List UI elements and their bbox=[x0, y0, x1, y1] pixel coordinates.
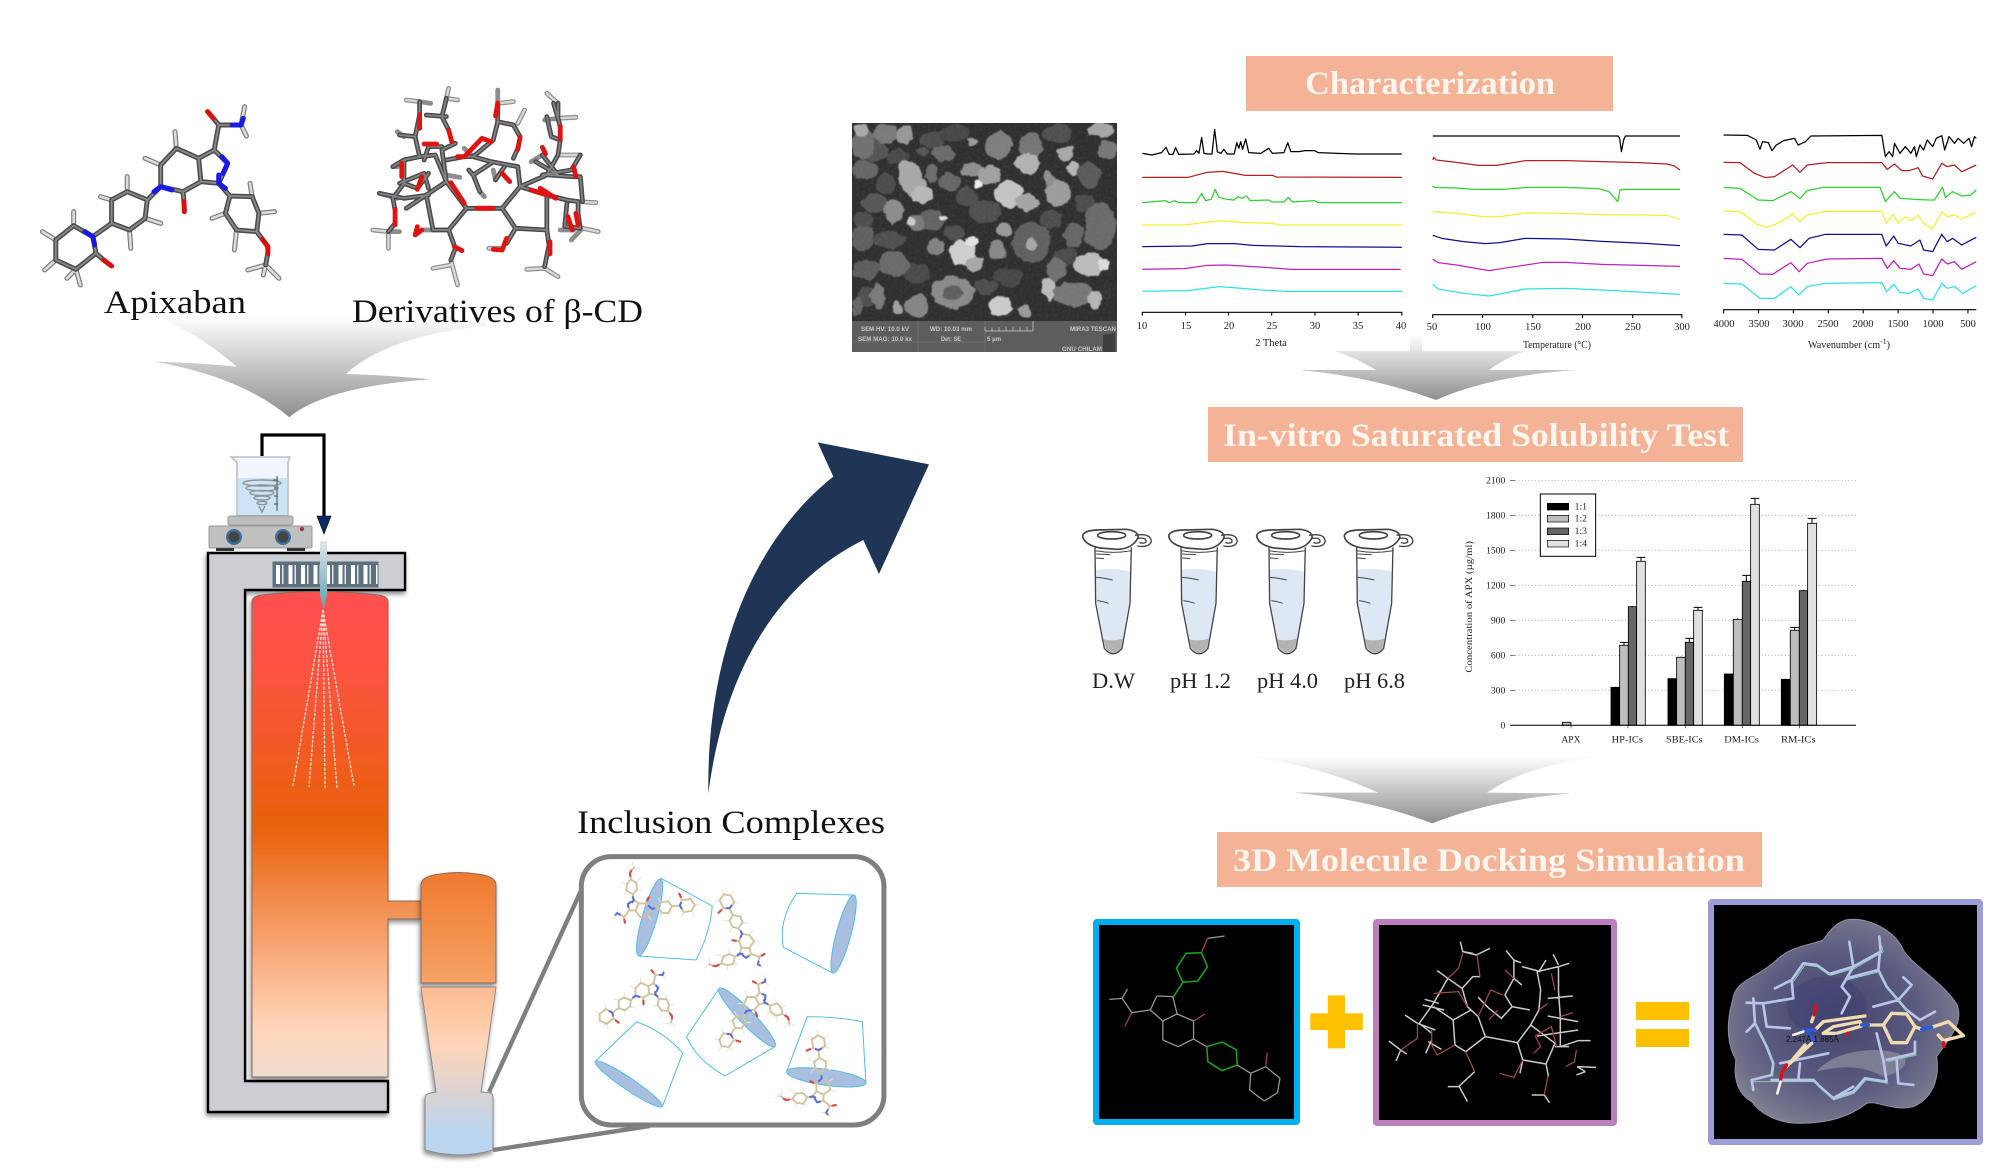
chart: FTIR: -1 bbox=[1880, 337, 1887, 346]
chart: DSC: Temperature (°C) bbox=[1523, 340, 1591, 351]
y axis labels: 900 bbox=[1491, 615, 1505, 626]
hot plate bbox=[228, 516, 293, 525]
cone 3 bbox=[592, 1022, 683, 1111]
zoom connector lines bbox=[489, 884, 650, 1150]
chart: XRD: 15 bbox=[1181, 321, 1191, 332]
heater coil bbox=[273, 562, 378, 587]
beaker liquid bbox=[238, 478, 287, 515]
spray lines bbox=[293, 610, 354, 788]
tube labels bbox=[1092, 668, 1405, 693]
chart: DSC: 150 bbox=[1525, 322, 1541, 333]
label: Derivatives of beta-CD: Derivatives of β-CD bbox=[352, 294, 643, 330]
chart: DSC: 50 bbox=[1427, 322, 1437, 333]
y axis labels bbox=[1486, 475, 1505, 731]
y axis title: Concentration of APX (µg/ml) bbox=[1464, 541, 1475, 673]
SEM image: SEM MAG: 10.0 kx bbox=[858, 336, 912, 343]
chart: XRD: 35 bbox=[1353, 321, 1363, 332]
SEM image bbox=[851, 123, 1117, 353]
category labels: DM-ICs bbox=[1724, 735, 1759, 746]
chart: FTIR: 2500 bbox=[1818, 319, 1838, 330]
equals sign bbox=[1636, 1002, 1689, 1047]
legend: 1:1 bbox=[1575, 502, 1587, 513]
cone 5 bbox=[786, 1017, 867, 1091]
nozzle bbox=[320, 541, 327, 610]
legend: 1:3 bbox=[1575, 526, 1587, 537]
tubes bbox=[1083, 529, 1413, 654]
y axis labels: 2100 bbox=[1486, 475, 1505, 486]
chart: FTIR: 4000 bbox=[1714, 319, 1734, 330]
mini apixaban molecules bbox=[595, 860, 865, 1127]
chart: DSC bbox=[1427, 136, 1690, 351]
molecular surface bbox=[1728, 919, 1959, 1123]
chart: XRD: 30 bbox=[1310, 321, 1320, 332]
chart: FTIR: 500 bbox=[1960, 319, 1976, 330]
chart: DSC: 200 bbox=[1575, 322, 1591, 333]
label: Inclusion Complexes: Inclusion Complexes bbox=[577, 805, 885, 841]
beaker bbox=[231, 457, 290, 515]
cyclone upper bbox=[421, 872, 496, 983]
SEM image: SEM HV: 10.0 kV bbox=[861, 326, 910, 333]
apixaban sticks bbox=[1777, 1006, 1963, 1093]
category labels bbox=[1561, 735, 1816, 746]
chart: XRD: 2 Theta bbox=[1255, 338, 1287, 349]
big arrow bbox=[708, 442, 929, 793]
chart: FTIR: 1000 bbox=[1922, 319, 1944, 330]
chart: FTIR: ) bbox=[1887, 340, 1890, 351]
stirrer and beaker bbox=[209, 457, 312, 551]
label: Apixaban: Apixaban bbox=[104, 285, 246, 321]
molecule: derivative of beta-CD bbox=[373, 88, 598, 285]
SEM image: 5 µm bbox=[987, 336, 1001, 343]
panel: cyclodextrin docking model bbox=[1376, 922, 1614, 1123]
chart: XRD: 10 bbox=[1137, 321, 1147, 332]
category labels: RM-ICs bbox=[1781, 735, 1816, 746]
chart: FTIR: Wavenumber (cm bbox=[1808, 340, 1883, 351]
chart: XRD: 25 bbox=[1267, 321, 1277, 332]
SEM image: Det: SE bbox=[941, 336, 962, 343]
plus sign bbox=[1310, 995, 1363, 1048]
arrow: molecules to spray dryer bbox=[154, 316, 487, 417]
chart: DSC: 100 bbox=[1475, 322, 1491, 333]
chart: FTIR: 3000 bbox=[1782, 319, 1804, 330]
cyclone cone and collector bbox=[421, 987, 496, 1155]
SEM image: MIRA3 TESCAN bbox=[1070, 326, 1116, 333]
bar chart: APX concentration bbox=[1464, 475, 1857, 746]
chart: FTIR bbox=[1714, 135, 1976, 351]
heading: 3D docking: 3D Molecule Docking Simulation bbox=[1233, 843, 1745, 879]
panel frame bbox=[581, 857, 884, 1125]
SEM image: WD: 10.03 mm bbox=[930, 326, 972, 333]
panel: apixaban docking model bbox=[1096, 922, 1297, 1122]
chart: DSC: 300 bbox=[1674, 322, 1690, 333]
heading: 3D docking bbox=[1217, 832, 1762, 887]
arrow: characterization to solubility bbox=[1299, 335, 1576, 400]
arrow: feed tube to nozzle bbox=[262, 435, 331, 534]
bars bbox=[1562, 504, 1817, 725]
y axis labels: 600 bbox=[1491, 650, 1505, 661]
chart: DSC: 250 bbox=[1625, 322, 1641, 333]
molecule: apixaban bbox=[42, 107, 279, 285]
distance label: 2.247Å 1.885Å bbox=[1786, 1035, 1839, 1044]
heading: in-vitro solubility test bbox=[1208, 407, 1743, 462]
chart: XRD: 40 bbox=[1396, 321, 1406, 332]
chart: FTIR: 1500 bbox=[1888, 319, 1908, 330]
panel: inclusion complexes bbox=[581, 857, 884, 1125]
chart: XRD: 20 bbox=[1224, 321, 1234, 332]
y axis labels: 1500 bbox=[1486, 545, 1505, 556]
legend bbox=[1540, 494, 1596, 556]
y axis labels: 1800 bbox=[1486, 510, 1505, 521]
chart: FTIR: 3500 bbox=[1748, 319, 1770, 330]
chart: FTIR: 2000 bbox=[1852, 319, 1874, 330]
arrow: solubility to docking bbox=[1238, 756, 1609, 823]
cone 4 bbox=[687, 983, 780, 1076]
heading: Characterization bbox=[1246, 56, 1613, 111]
category labels: APX bbox=[1561, 735, 1581, 746]
chart: XRD bbox=[1137, 129, 1406, 349]
heading: Characterization: Characterization bbox=[1305, 66, 1555, 102]
tube labels: pH 6.8 bbox=[1344, 668, 1405, 693]
tube labels: D.W bbox=[1092, 668, 1135, 693]
y axis labels: 1200 bbox=[1486, 580, 1505, 591]
panel: inclusion complex docking result bbox=[1711, 902, 1980, 1142]
category labels: SBE-ICs bbox=[1666, 735, 1703, 746]
y axis labels: 300 bbox=[1491, 685, 1505, 696]
legend: 1:2 bbox=[1575, 514, 1587, 525]
y axis labels: 0 bbox=[1500, 720, 1505, 731]
error bars bbox=[1620, 498, 1817, 657]
dryer frame bbox=[208, 553, 405, 1112]
tube labels: pH 1.2 bbox=[1170, 668, 1231, 693]
vortex bbox=[243, 476, 281, 512]
cyclodextrin sticks bbox=[1747, 937, 1935, 1098]
drying chamber bbox=[252, 592, 421, 1077]
cone 1 bbox=[632, 877, 712, 960]
category labels: HP-ICs bbox=[1612, 735, 1643, 746]
spray dryer bbox=[208, 541, 496, 1155]
legend: 1:4 bbox=[1575, 539, 1587, 550]
tube labels: pH 4.0 bbox=[1257, 668, 1318, 693]
SEM info bar bbox=[852, 321, 1117, 352]
heading: in-vitro solubility test: In-vitro Saturated Solubility Test bbox=[1223, 418, 1729, 454]
SEM image: GNU CHILAM bbox=[1062, 346, 1102, 353]
cone 2 bbox=[782, 893, 861, 975]
